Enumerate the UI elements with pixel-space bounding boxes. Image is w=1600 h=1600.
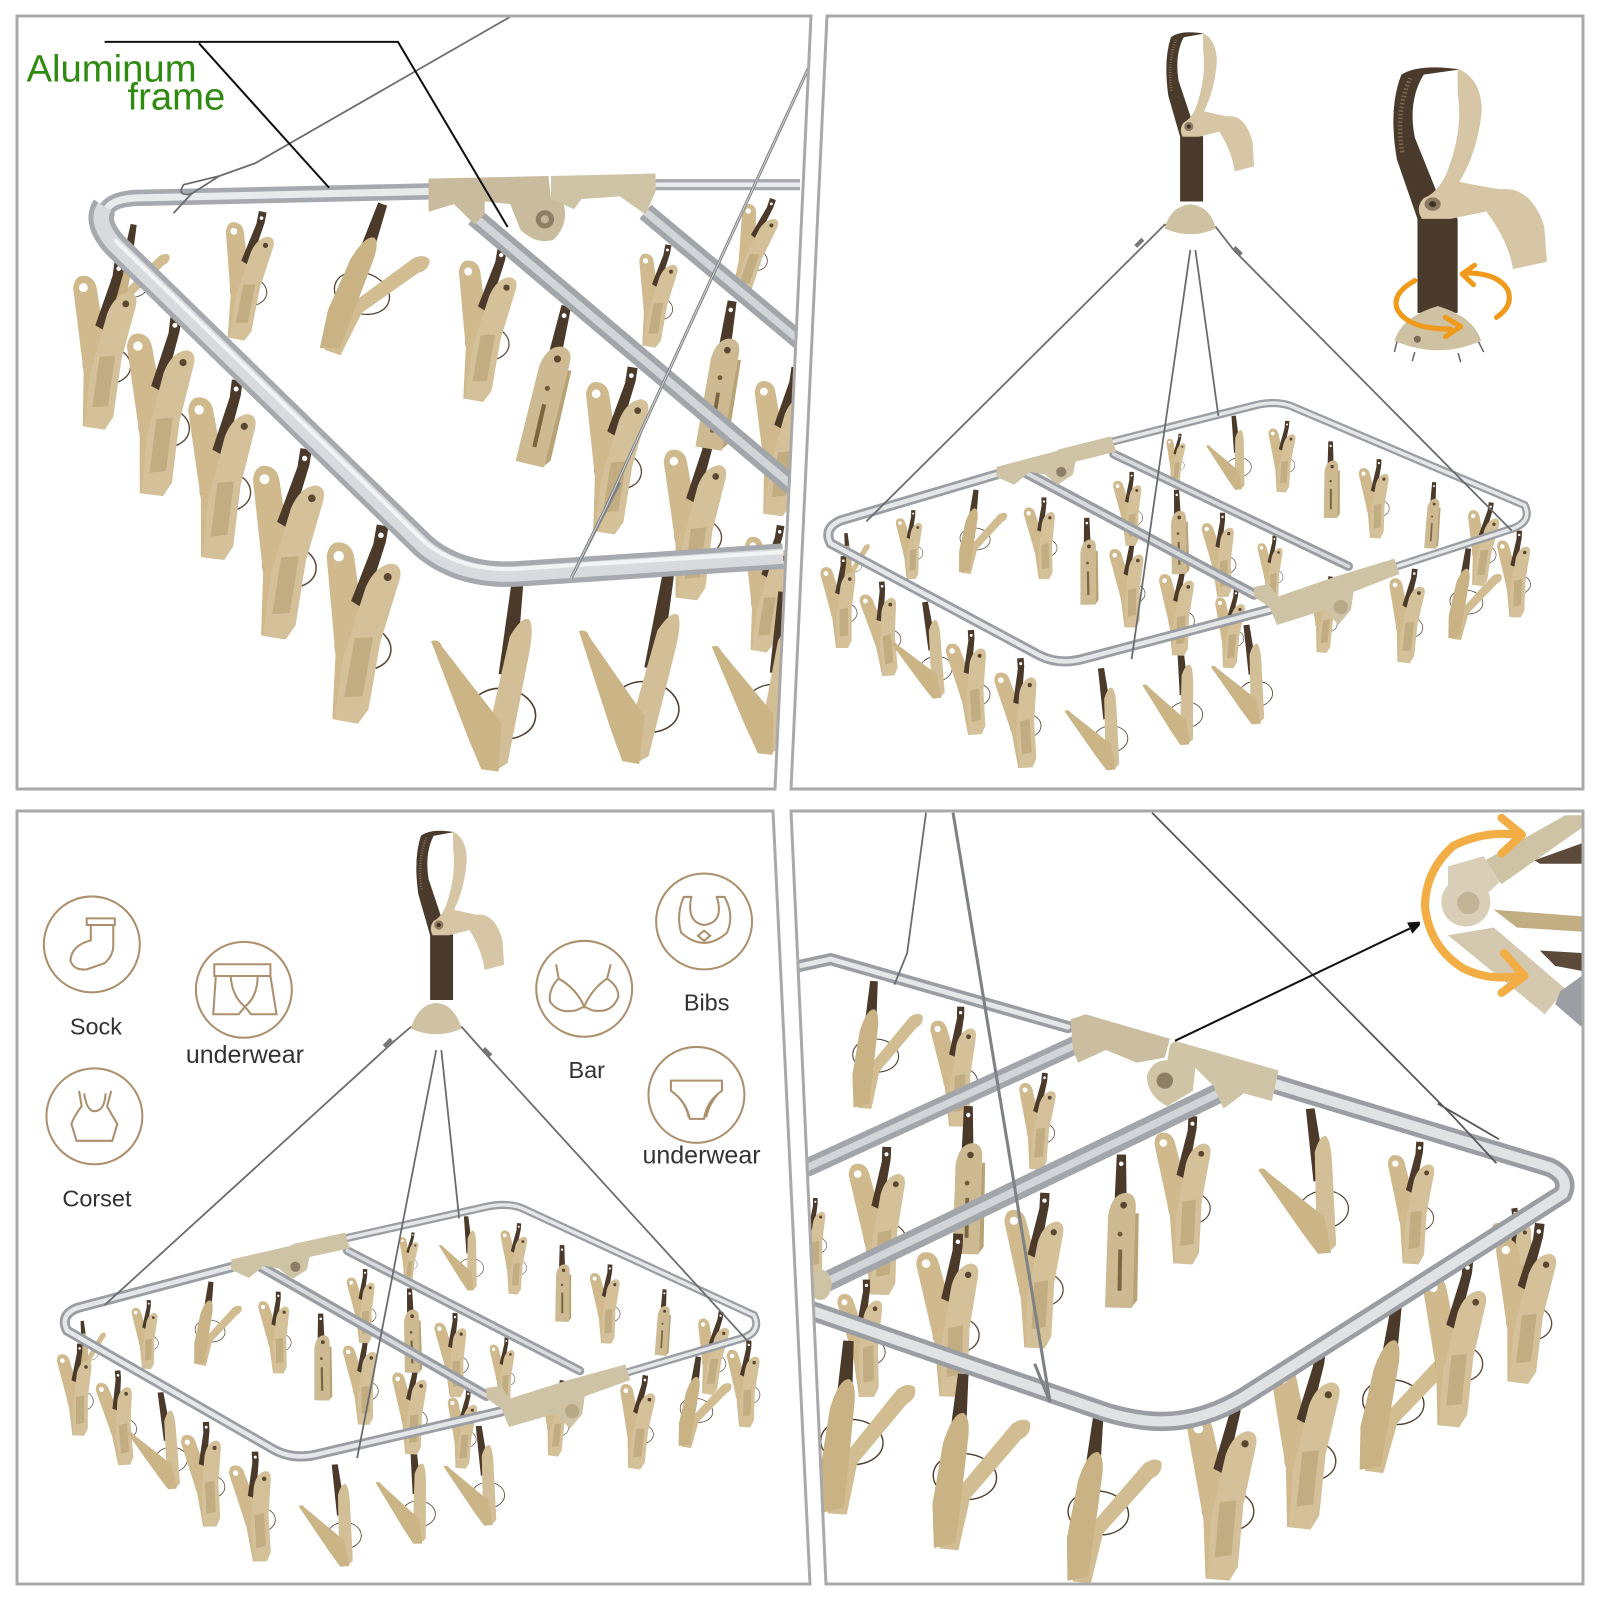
hanging wires bbox=[105, 1027, 747, 1458]
icon: boxer underwear bbox=[196, 942, 292, 1038]
hanging wires bbox=[894, 813, 1499, 1402]
panel: suitable laundry icons bbox=[42, 830, 760, 1567]
icon labels: Corset bbox=[62, 1186, 132, 1212]
hanger: frame and pegs bbox=[820, 403, 1532, 774]
aluminum frame rails bbox=[101, 185, 801, 574]
inset: rotating joint bbox=[1420, 813, 1582, 1030]
icon labels: Sock bbox=[70, 1014, 122, 1040]
icon: sock bbox=[44, 896, 140, 992]
label: Aluminum frame bbox=[26, 54, 224, 110]
icon labels: underwear bbox=[642, 1141, 761, 1169]
panel: full hanger with swivel hook bbox=[820, 32, 1547, 770]
panel: aluminum frame close-up bbox=[26, 18, 808, 772]
hanger: frame and pegs bbox=[57, 1190, 762, 1585]
panel: folding joint close-up bbox=[790, 800, 1600, 1600]
dome connector bbox=[383, 1003, 492, 1057]
enlarged swivel hook bbox=[1393, 67, 1547, 362]
icon labels: Bar bbox=[568, 1057, 605, 1083]
orange rotation arrows bbox=[1396, 265, 1509, 337]
icon labels: underwear bbox=[186, 1041, 304, 1069]
icon: briefs bbox=[648, 1047, 744, 1143]
hanging wires bbox=[173, 17, 816, 578]
beige connector bbox=[429, 173, 656, 241]
hanging wires bbox=[866, 224, 1512, 659]
clothes pegs bbox=[796, 980, 1564, 1589]
swivel hook bbox=[1166, 32, 1254, 202]
icon labels bbox=[62, 990, 761, 1212]
icon labels: Bibs bbox=[684, 990, 729, 1016]
dome connector bbox=[1134, 204, 1243, 256]
icon: bra bbox=[536, 941, 632, 1037]
label: Aluminum frame: frame bbox=[128, 76, 225, 119]
swivel hook bbox=[416, 831, 504, 1000]
icon: bib bbox=[656, 873, 752, 969]
aluminum frame rails bbox=[800, 959, 1565, 1421]
callout arrow bbox=[1175, 921, 1423, 1041]
callout lines bbox=[105, 42, 508, 227]
clothes pegs bbox=[54, 191, 818, 776]
icon: corset bbox=[46, 1068, 142, 1164]
label: Aluminum frame: Aluminum bbox=[27, 48, 197, 91]
beige connector bbox=[809, 1014, 1279, 1300]
